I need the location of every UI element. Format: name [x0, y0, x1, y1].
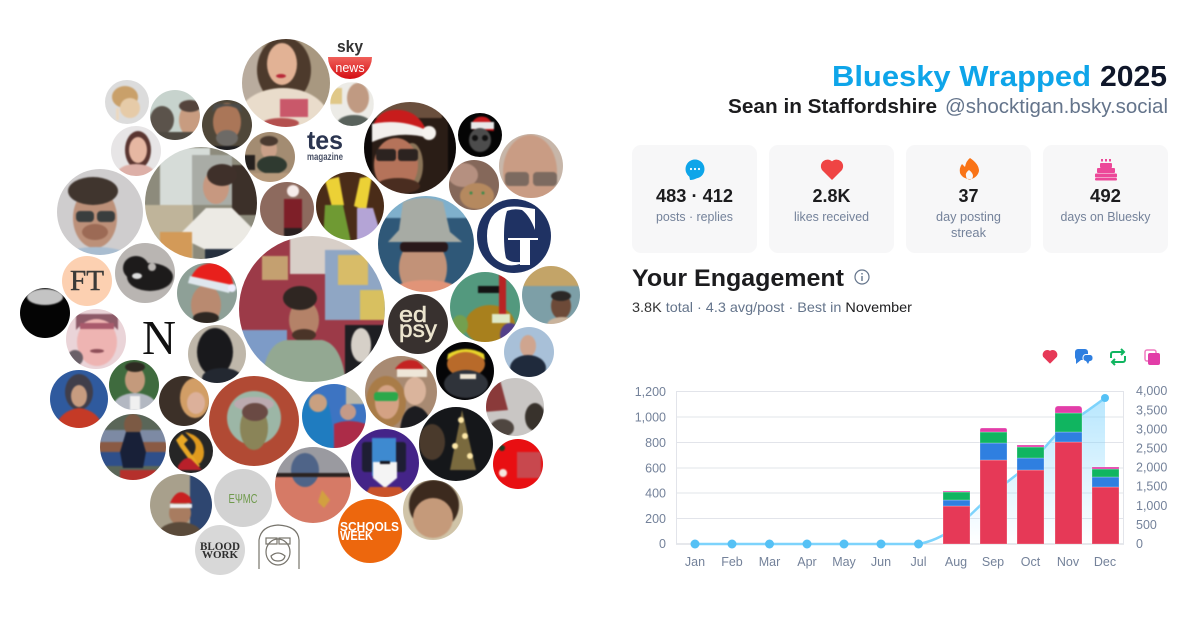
panel: days on Bluesky stat — [1043, 145, 1168, 253]
avatar: woman on bench — [100, 414, 166, 480]
bar: Aug — [943, 491, 970, 544]
icon: flame — [960, 158, 979, 180]
engagement summary text: 3.8K total · 4.3 avg/post · Best in November — [632, 299, 912, 315]
right axis labels: 4,000 — [1136, 384, 1167, 398]
icon: replies bubbles — [1075, 349, 1093, 364]
panel: likes received stat — [769, 145, 894, 253]
right axis labels: 2,500 — [1136, 442, 1167, 456]
grid lines — [676, 391, 1124, 544]
avatar: woman in christmas jumper — [242, 39, 330, 127]
left axis labels: 1,200 — [635, 385, 666, 399]
avatar: ginger cat and person — [449, 160, 499, 210]
avatar: EYMC logo: EΨMC — [228, 492, 258, 506]
avatar: santa selfie street — [150, 474, 212, 536]
avatar: badger drawing — [115, 243, 175, 303]
avatar: Blood Work logo: WORK — [202, 549, 238, 561]
author name and handle: @shocktigan.bsky.social — [945, 96, 1168, 118]
icon: speech bubble — [686, 160, 704, 180]
panel: posts and replies stat — [632, 145, 757, 253]
month labels: Jun — [871, 555, 891, 569]
left axis labels: 200 — [645, 512, 666, 526]
chart legend icons — [1043, 349, 1160, 365]
right axis labels: 2,000 — [1136, 460, 1167, 474]
author name and handle — [728, 96, 1168, 118]
avatar: black dog — [188, 325, 246, 383]
panel: avatar bubble cluster — [18, 36, 582, 575]
line markers — [690, 394, 1109, 548]
left axis labels: 400 — [645, 486, 666, 500]
avatar: pink blurred face — [66, 309, 126, 369]
avatar: sky news logo: news — [335, 61, 365, 75]
avatar: man in santa hat — [177, 263, 237, 323]
month labels: Jan — [685, 555, 705, 569]
avatar: man in suit — [109, 360, 159, 410]
avatar: man with glasses — [57, 169, 143, 255]
avatar: mosaic wall with man — [237, 234, 387, 384]
left axis labels: 0 — [659, 537, 666, 551]
avatar: hamster — [105, 80, 149, 124]
cumulative line — [695, 398, 1105, 544]
avatar: bald man with glasses — [499, 134, 563, 198]
right axis labels: 3,000 — [1136, 422, 1167, 436]
icon: heart — [822, 160, 842, 179]
avatar: christmas couple — [365, 356, 437, 428]
avatar: Schools Week logo — [338, 499, 402, 563]
left axis labels — [635, 385, 666, 551]
month labels: Sep — [982, 555, 1004, 569]
avatar: FT logo: FT — [70, 266, 104, 297]
avatar: cartoon yellow characters — [316, 172, 384, 240]
left axis labels: 800 — [645, 436, 666, 450]
avatar: tes magazine logo: magazine — [307, 152, 343, 163]
icon: likes heart — [1043, 351, 1057, 363]
author name and handle: Sean in Staffordshire — [728, 96, 937, 118]
icon: quotes squares — [1145, 350, 1160, 365]
heading: your engagement: Your Engagement — [632, 265, 844, 292]
month labels: Apr — [797, 555, 817, 569]
avatar: woman in bucket hat — [378, 196, 474, 292]
avatar: blue jacket hikers — [302, 384, 366, 448]
title: Bluesky Wrapped — [832, 61, 1091, 93]
avatar: black teeth photo — [20, 288, 70, 338]
bar: Nov — [1055, 406, 1082, 544]
right axis labels: 1,000 — [1136, 499, 1167, 513]
avatar: edpsy logo: ed — [399, 302, 427, 327]
icon: info — [855, 270, 869, 284]
avatar: sky news logo: sky — [337, 37, 363, 56]
avatar: red wizard illustration — [50, 370, 108, 428]
avatar: bird with sunglasses and santa hat — [450, 272, 520, 342]
right axis labels: 0 — [1136, 537, 1143, 551]
avatar: cartoon pirate — [436, 342, 494, 400]
avatar: christmas lights at night — [417, 405, 495, 483]
avatar: Marx comic illustration — [273, 445, 353, 525]
right axis labels: 1,500 — [1136, 480, 1167, 494]
panel: days on Bluesky stat: 492 — [1090, 185, 1121, 206]
panel: posting streak stat: 37 — [958, 185, 978, 206]
avatar: statue and man — [150, 90, 200, 140]
month labels: Feb — [721, 555, 743, 569]
panel: posting streak stat: day posting — [936, 210, 1001, 224]
chart: monthly engagement stacked bars with cumulative line — [635, 384, 1167, 569]
month labels: Jul — [911, 555, 926, 569]
panel: posts and replies stat: posts · replies — [656, 210, 733, 224]
panel: likes received stat: likes received — [794, 210, 869, 224]
month labels: Oct — [1021, 555, 1041, 569]
title: 2025 — [1100, 61, 1167, 93]
month labels: Mar — [759, 555, 780, 569]
avatar: podcast man — [245, 132, 295, 182]
cumulative area — [918, 398, 1105, 544]
avatar: Guardian logo — [477, 199, 551, 273]
avatar: sketch of bearded man — [259, 525, 299, 569]
panel: posts and replies stat: 483 · 412 — [656, 185, 733, 206]
avatar: edpsy logo: psy — [399, 316, 438, 342]
avatar: Schools Week logo: SCHOOLS — [340, 520, 399, 534]
panel: likes received stat: 2.8K — [812, 185, 851, 206]
avatar: N logo: N — [142, 310, 176, 365]
avatar: EYMC logo — [214, 469, 272, 527]
month labels: Dec — [1094, 555, 1116, 569]
avatar: FT logo — [62, 256, 112, 306]
bar: Sep — [980, 428, 1007, 544]
right axis labels — [1136, 384, 1167, 551]
panel: posting streak stat: streak — [951, 226, 987, 240]
avatar: cyberman illustration — [351, 429, 419, 497]
avatar: man in cloud sky — [504, 327, 554, 377]
left axis labels: 600 — [645, 462, 666, 476]
avatar: woman with brown hair — [111, 126, 161, 176]
avatar: sky news logo — [328, 37, 372, 79]
avatar: Schools Week logo: WEEK — [340, 529, 373, 543]
avatar: grey bearded man — [202, 100, 252, 150]
month labels — [685, 555, 1116, 569]
bar: Oct — [1017, 445, 1044, 544]
panel: days on Bluesky stat: days on Bluesky — [1060, 210, 1151, 224]
avatar: woman with dark fringe — [401, 478, 465, 542]
avatar: skull in santa hat — [458, 113, 502, 157]
month labels: Nov — [1057, 555, 1080, 569]
month labels: May — [832, 555, 857, 569]
avatar: dark room with red figure — [260, 182, 314, 236]
avatar: hammer and sickle — [169, 429, 213, 473]
avatar: Blood Work logo: BLOOD — [200, 541, 240, 553]
avatar: edpsy logo — [388, 294, 448, 354]
icon: birthday cake — [1095, 159, 1117, 180]
avatar: bald man in profile — [330, 82, 374, 126]
avatar: blonde woman and black cat — [159, 376, 209, 426]
avatar: santa selfie man with glasses — [362, 100, 458, 196]
avatar: man at sunset sea — [522, 266, 580, 324]
panel: posting streak stat — [906, 145, 1031, 253]
right axis labels: 3,500 — [1136, 404, 1167, 418]
right axis labels: 500 — [1136, 518, 1157, 532]
avatar: tes magazine logo: tes — [307, 125, 343, 155]
icon: reposts arrows — [1111, 349, 1125, 365]
avatar: Blood Work logo — [195, 525, 245, 575]
avatar: man in white shirt at cafe — [143, 145, 259, 261]
avatar: red disc with toy figure — [207, 374, 301, 468]
month labels: Aug — [945, 555, 967, 569]
left axis labels: 1,000 — [635, 410, 666, 424]
bar: Dec — [1092, 467, 1119, 544]
avatar: red chart — [493, 439, 543, 489]
avatar: grey blurred figures — [486, 378, 544, 436]
